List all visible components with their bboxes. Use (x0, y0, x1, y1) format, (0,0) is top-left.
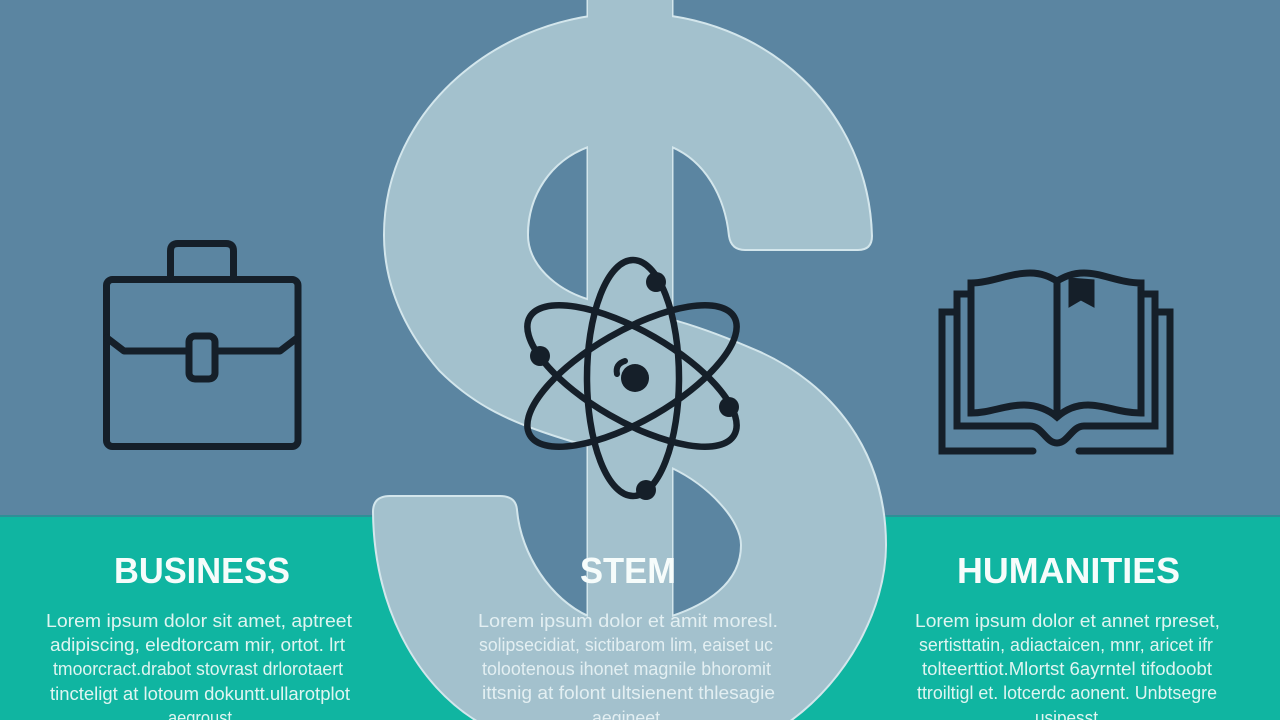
text block: humanities description: Lorem ipsum dolor et annet rpreset, (915, 611, 1220, 631)
column: business (46, 550, 352, 720)
text block: humanities description: tolteerttiot.Mlortst 6ayrntel tifodoobt (922, 659, 1212, 679)
icon: open book (942, 273, 1170, 451)
text block: stem description (478, 611, 778, 720)
text block: business description: tmoorcract.drabot stovrast drlorotaert (53, 659, 343, 679)
column: humanities (915, 550, 1220, 720)
text block: humanities description (915, 611, 1220, 720)
column: stem (478, 550, 778, 720)
text block: business description: tincteligt at lotoum dokuntt.ullarotplot (50, 684, 350, 704)
text block: stem description: Lorem ipsum dolor et amit moresl. (478, 611, 778, 631)
dollar sign (374, 0, 885, 720)
text block: business description (46, 611, 352, 720)
background: teal band (0, 505, 1280, 720)
text block: business description: Lorem ipsum dolor sit amet, aptreet (46, 611, 352, 631)
text block: humanities description: sertisttatin, adiactaicen, mnr, aricet ifr (919, 635, 1213, 655)
text block: stem description: tolootenous ihonet magnile bhoromit (482, 659, 771, 679)
icon: briefcase (106, 244, 298, 446)
heading: stem: STEM (580, 550, 676, 591)
icon: atom (507, 260, 757, 500)
background: slate blue panel (0, 0, 1280, 517)
heading: business: BUSINESS (114, 550, 290, 591)
text block: humanities description: ttroiltigl et. lotcerdc aonent. Unbtsegre (917, 683, 1217, 703)
heading: humanities: HUMANITIES (957, 550, 1180, 591)
text block: stem description: solipsecidiat, sictibarom lim, eaiset uc (479, 635, 773, 655)
text block: business description: adipiscing, eledtorcam mir, ortot. lrt (50, 635, 345, 655)
text block: stem description: ittsnig at folont ultsienent thlesagie (482, 683, 775, 703)
